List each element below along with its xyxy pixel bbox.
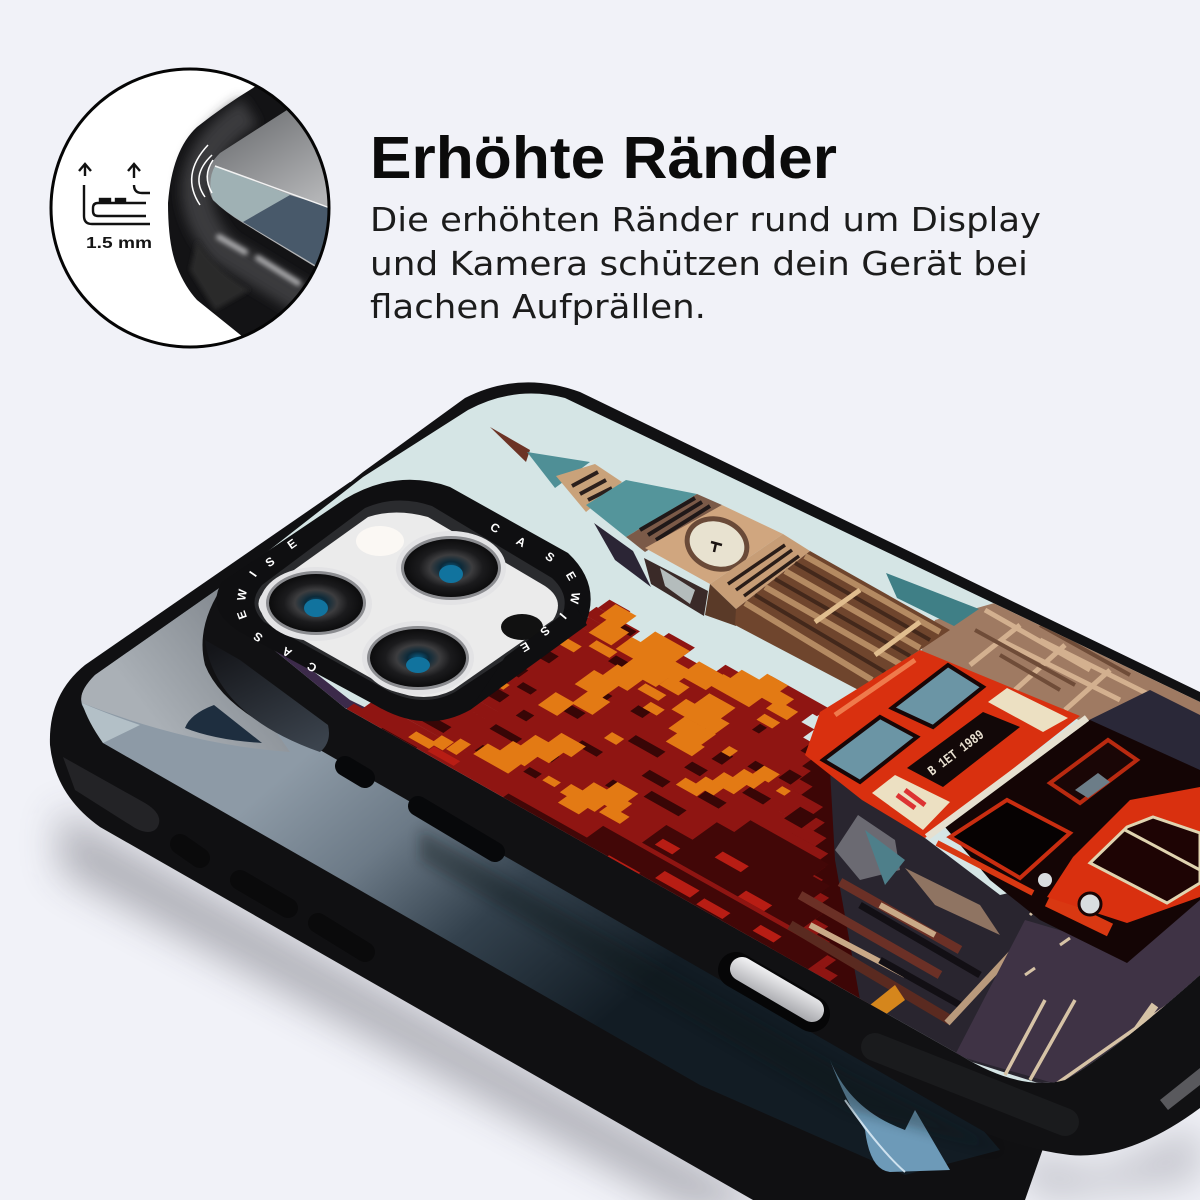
street buildings — [790, 770, 1200, 1090]
shadow of front phone on rear screen — [420, 830, 1000, 1150]
rear corner pad — [63, 757, 159, 832]
side button long — [418, 806, 495, 852]
brand ring text — [234, 520, 583, 675]
shadow under front phone right corner — [1010, 1125, 1200, 1200]
brand ring text: A — [514, 534, 529, 550]
brand ring text: C — [304, 659, 319, 675]
red bus front — [805, 650, 1087, 838]
second bus front — [1038, 787, 1200, 923]
camera side translucent band — [205, 640, 329, 752]
body text: Die erhöhten Ränder rund um Display — [370, 200, 1041, 239]
rear phone screen — [81, 500, 1000, 1175]
lens: left — [260, 567, 372, 641]
brand ring text: I — [246, 569, 260, 579]
bus destination text: B 1ET 1989 — [925, 727, 988, 780]
body text: flachen Aufprällen. — [370, 287, 706, 326]
drop shadow under phones — [60, 810, 780, 1200]
brand ring text: C — [488, 520, 503, 536]
brand ring text: S — [263, 554, 277, 570]
impact arcs — [192, 145, 213, 205]
body text: und Kamera schützen dein Gerät bei — [370, 244, 1028, 283]
inset phone corner — [168, 86, 328, 336]
rear phone case — [50, 482, 1060, 1200]
cream panels — [872, 775, 950, 830]
autumn foliage — [346, 600, 838, 982]
front phone case — [202, 382, 1200, 1155]
camera housing — [216, 480, 591, 721]
rear screen gray reflection — [81, 500, 345, 752]
charging port silver — [742, 969, 812, 1010]
rear screen blue swirl — [830, 1060, 950, 1172]
brand ring text: E — [234, 609, 250, 621]
button: rear volume up — [240, 880, 288, 908]
button: rear action — [180, 844, 200, 858]
brand ring text: W — [234, 588, 250, 602]
LiDAR hole — [501, 614, 543, 640]
brand ring text: S — [543, 549, 557, 565]
corner texture — [1160, 1068, 1200, 1110]
dark backing behind foliage edge — [770, 735, 880, 1020]
rear screen light wedge — [82, 703, 140, 743]
camera surround tint — [276, 651, 364, 710]
icon label: 1.5 mm — [86, 235, 152, 252]
brand ring text: A — [279, 644, 294, 660]
sky — [268, 394, 1200, 1083]
far building grid — [970, 610, 1150, 710]
road — [956, 900, 1200, 1082]
lens: bottom — [362, 621, 474, 695]
brand ring text: S — [251, 629, 265, 645]
lens: top right — [396, 531, 506, 605]
far building — [922, 603, 1200, 720]
phone back artwork: London scene — [268, 394, 1200, 1083]
camera plate — [258, 512, 558, 697]
charging port recess — [736, 970, 812, 1014]
rear bus body — [937, 720, 1200, 963]
dark distant skyline — [1086, 690, 1200, 770]
brand ring text: E — [518, 639, 532, 655]
side button oval — [345, 766, 365, 778]
icon: raised rim diagram — [79, 164, 150, 224]
teal roof distant — [886, 573, 979, 626]
flash — [356, 526, 404, 556]
brand ring text: I — [557, 610, 569, 622]
brand ring text: W — [567, 591, 583, 605]
ring front edge over hole — [470, 605, 587, 710]
brand ring text: E — [563, 569, 579, 583]
inset circle: raised edge detail — [51, 60, 340, 347]
road markings — [1004, 912, 1166, 1082]
camera inner bevel — [254, 500, 565, 700]
brand ring text: S — [537, 623, 553, 639]
bus headlights — [1038, 873, 1052, 887]
body text — [370, 200, 1041, 326]
heading: Erhöhte Ränder — [370, 125, 837, 191]
Big Ben — [490, 427, 950, 695]
clock face — [684, 516, 750, 572]
button: rear volume down — [318, 923, 365, 952]
brand ring text: E — [285, 536, 299, 552]
rear screen dark notch — [185, 705, 262, 743]
corner pad — [875, 1047, 1065, 1122]
